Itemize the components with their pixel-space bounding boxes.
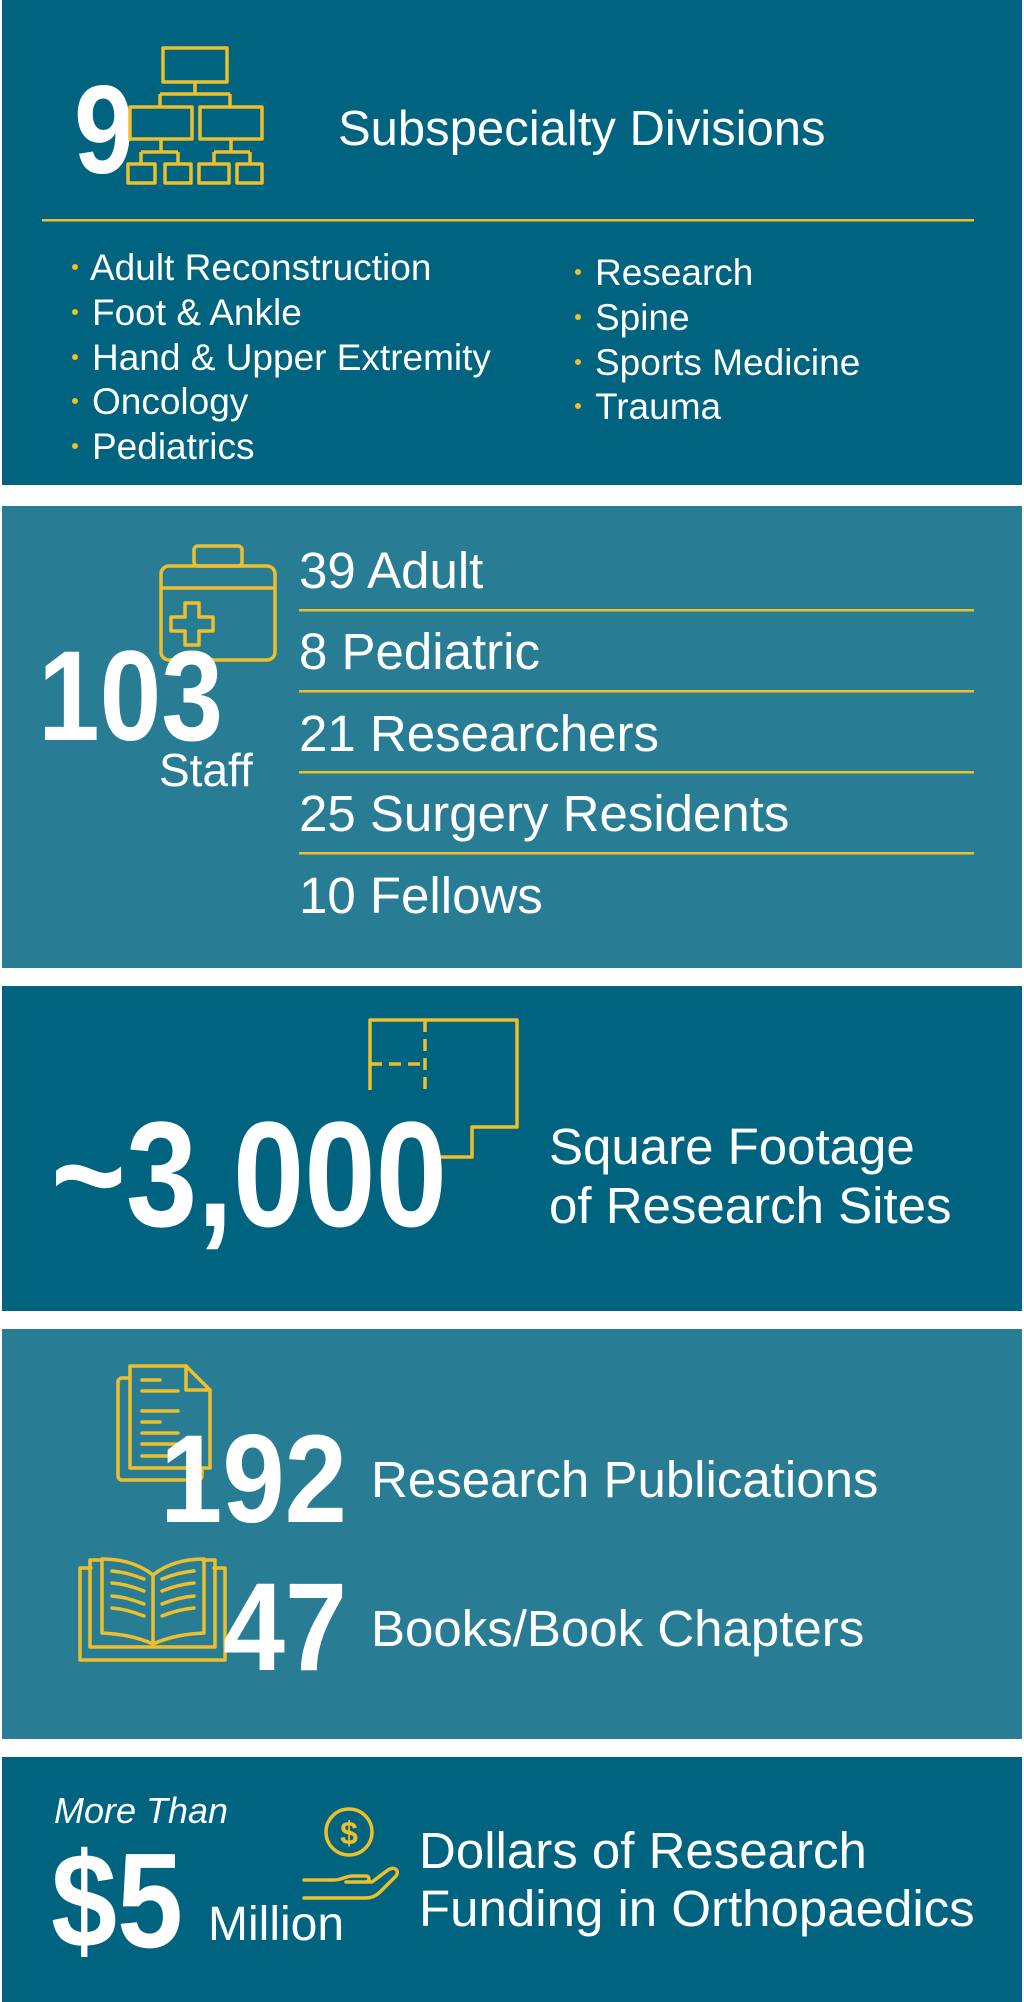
heading: Subspecialty Divisions (338, 102, 826, 156)
panel: staff: Staff (159, 744, 253, 796)
staff breakdown list: 21 Researchers (299, 705, 659, 762)
list: right column: Sports Medicine (595, 342, 860, 383)
panel: square footage: Square Footage (549, 1118, 915, 1175)
list: left column: Foot & Ankle (92, 292, 302, 333)
icon: document (118, 1366, 210, 1480)
staff breakdown list: 39 Adult (299, 542, 483, 599)
staff breakdown list: 10 Fellows (299, 867, 543, 924)
staff breakdown list: 8 Pediatric (299, 623, 540, 680)
panel: square footage: of Research Sites (549, 1177, 952, 1234)
icon: hand with coin (304, 1809, 397, 1898)
big number ~3,000: ~3,000 (51, 1090, 447, 1258)
icon: org chart (128, 48, 262, 183)
icon: hand with coin: $ (340, 1815, 358, 1851)
panel: subspecialty divisions (2, 0, 1022, 485)
panel: square footage (2, 986, 1022, 1311)
icon: medical bag (161, 546, 275, 660)
icon: open book (80, 1559, 225, 1660)
list: right column: Spine (595, 297, 690, 338)
list: left column: Pediatrics (92, 426, 254, 467)
list: left column: Adult Reconstruction (90, 247, 431, 288)
big number 192: 192 (160, 1410, 347, 1549)
panel: research funding: Funding in Orthopaedics (419, 1880, 975, 1937)
list: left column: Oncology (92, 381, 249, 422)
panel: publications (2, 1329, 1022, 1739)
panel: research funding: Dollars of Research (419, 1822, 867, 1879)
staff breakdown list: 25 Surgery Residents (299, 785, 789, 842)
big number 103: 103 (38, 625, 223, 768)
panel: staff (2, 506, 1022, 968)
staff breakdown list (299, 542, 974, 924)
list: left column (72, 247, 491, 467)
panel: research funding: More Than (54, 1790, 228, 1831)
list: right column (575, 252, 860, 427)
list: right column: Research (595, 252, 753, 293)
big number 9: 9 (74, 61, 134, 200)
big number 47: 47 (223, 1558, 347, 1697)
panel: research funding: Million (208, 1898, 344, 1951)
big number $5: $5 (51, 1825, 183, 1976)
panel: publications: Research Publications (371, 1451, 878, 1508)
list: right column: Trauma (595, 386, 722, 427)
panel: publications: Books/Book Chapters (371, 1600, 864, 1657)
list: left column: Hand & Upper Extremity (92, 337, 491, 378)
panel: research funding (2, 1757, 1022, 2002)
icon: floor plan (370, 1020, 517, 1157)
